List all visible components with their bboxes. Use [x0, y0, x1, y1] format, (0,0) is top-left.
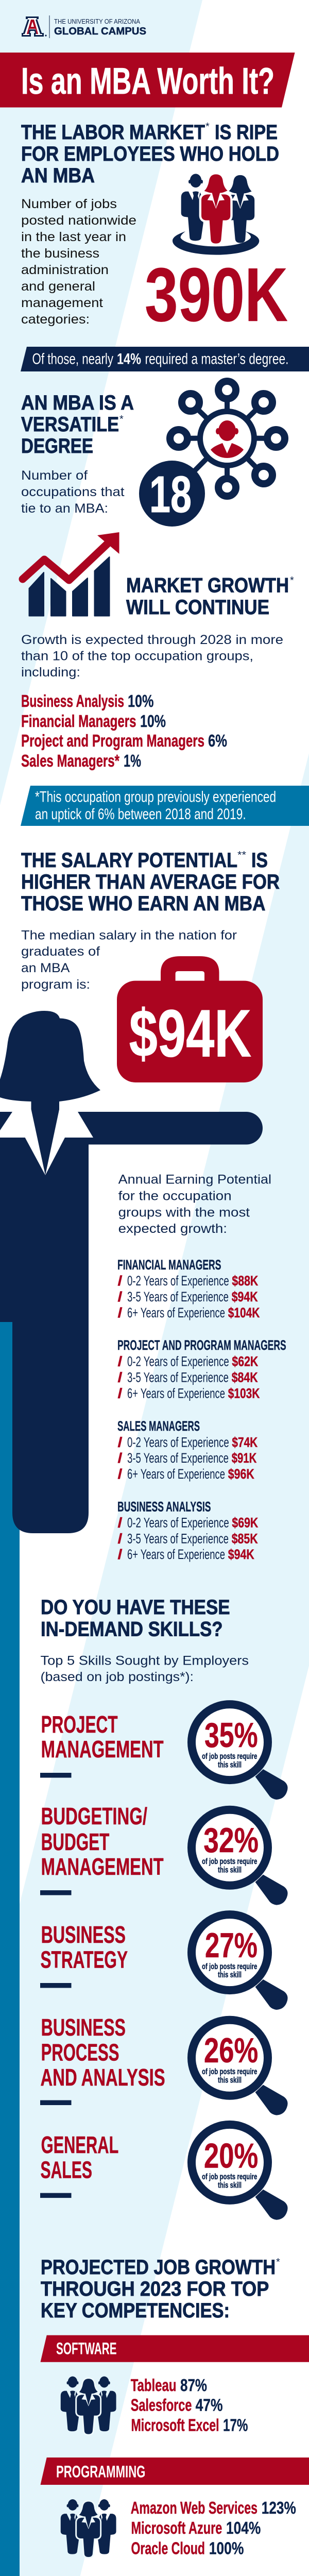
list: sales managers earnings: 3-5 Years of Experience: [127, 1450, 229, 1466]
list: business analysis earnings: 6+ Years of Experience: [127, 1547, 225, 1562]
skill: general sales: GENERAL: [41, 2131, 118, 2158]
list: financial managers earnings: 6+ Years of Experience: [127, 1305, 225, 1320]
list: programming growth: [131, 2498, 296, 2557]
text: annual earning potential: Annual Earning Potential: [118, 1173, 271, 1187]
callout: occupation group note: [21, 786, 309, 826]
list: growth by occupation group: Financial Managers: [21, 711, 136, 731]
list: sales managers earnings: $91K: [232, 1450, 257, 1466]
heading: projected job growth: *: [276, 2257, 280, 2268]
skill: business strategy: [40, 1921, 128, 1988]
magnifier: 26%: of job posts require: [202, 2067, 258, 2076]
list: growth by occupation group: Business Analysis: [21, 691, 124, 710]
list: project and program managers earnings: $62K: [232, 1353, 259, 1369]
heading: projected job growth: THROUGH 2023 FOR TOP: [41, 2278, 269, 2300]
banner: programming: [40, 2458, 309, 2485]
magnifier: 26%: this skill: [218, 2076, 242, 2084]
skill: budgeting / budget management: MANAGEMENT: [41, 1853, 164, 1880]
list: business analysis earnings: $85K: [232, 1531, 258, 1547]
skill: general sales: SALES: [40, 2157, 92, 2183]
skill: business process and analysis: PROCESS: [41, 2039, 119, 2066]
heading: market growth: [126, 574, 294, 619]
heading: salary potential: **: [237, 850, 246, 861]
magnifier: 32%: of job posts require: [202, 1857, 258, 1866]
text: number of jobs posted: in the last year in: [21, 230, 126, 244]
title banner: [0, 53, 295, 107]
list: business analysis earnings: $69K: [232, 1515, 259, 1531]
text: number of occupations: occupations that: [21, 485, 125, 499]
logo: University of Arizona Global Campus: THE UNIVERSITY OF ARIZONA: [54, 18, 140, 25]
banner: software: [40, 2335, 309, 2362]
list: growth by occupation group: 1%: [124, 751, 141, 770]
list: financial managers earnings: 0-2 Years of Experience: [127, 1273, 229, 1289]
list: financial managers earnings: FINANCIAL MANAGERS: [117, 1257, 221, 1273]
list: programming growth: Microsoft Azure: [131, 2518, 222, 2537]
heading: in-demand skills: [41, 1596, 230, 1640]
heading: labor market: IS RIPE: [215, 121, 278, 144]
heading: in-demand skills: IN-DEMAND SKILLS?: [41, 1618, 222, 1640]
magnifier: 27%: this skill: [218, 1971, 242, 1979]
list: growth by occupation group: 10%: [128, 691, 153, 710]
text: growth expected: [21, 633, 283, 680]
skill: business process and analysis: AND ANALYSIS: [40, 2064, 165, 2091]
heading: market growth: MARKET GROWTH: [126, 574, 289, 597]
skill: project management: MANAGEMENT: [41, 1736, 164, 1762]
magnifier: 20%: 20%: [204, 2137, 258, 2176]
magnifier: 32%: 32%: [203, 1821, 259, 1860]
heading: market growth: *: [290, 575, 294, 586]
list: project and program managers earnings: 0-2 Years of Experience: [127, 1353, 229, 1369]
list: financial managers earnings: /: [117, 1305, 123, 1320]
icon: software team: [61, 2377, 116, 2434]
magnifier: 32%: this skill: [218, 1866, 242, 1875]
icon: three business people on a ring: [173, 174, 259, 255]
heading: salary potential: [21, 849, 280, 915]
skill: project management: [40, 1711, 164, 1777]
callout: 14% required a master's degree: [21, 347, 309, 371]
icon: businesswoman figure with outstretched arm: [0, 1011, 263, 1533]
text: median salary: [21, 928, 237, 992]
list: project and program managers earnings: $84K: [232, 1370, 258, 1385]
list: project and program managers earnings: $103K: [228, 1385, 260, 1401]
list: sales managers earnings: /: [117, 1434, 123, 1450]
list: sales managers earnings: $74K: [232, 1434, 258, 1450]
list: programming growth: 123%: [262, 2498, 296, 2517]
list: sales managers earnings: SALES MANAGERS: [117, 1418, 200, 1434]
text: number of jobs posted: [21, 197, 136, 327]
skill: business strategy: BUSINESS: [41, 1921, 126, 1948]
heading: labor market: AN MBA: [21, 164, 95, 187]
skill: budgeting / budget management: [40, 1803, 164, 1895]
list: programming growth: 100%: [209, 2539, 244, 2557]
list: project and program managers earnings: [117, 1337, 286, 1401]
text: median salary: The median salary in the nation for: [21, 928, 237, 943]
heading: labor market: *: [205, 121, 210, 132]
text: number of jobs posted: administration: [21, 263, 109, 277]
text: number of jobs posted: management: [21, 296, 103, 310]
list: financial managers earnings: $88K: [232, 1273, 259, 1289]
list: project and program managers earnings: 3-5 Years of Experience: [127, 1370, 229, 1385]
heading: versatile degree: DEGREE: [21, 435, 93, 457]
list: sales managers earnings: [117, 1418, 258, 1482]
banner: software: SOFTWARE: [56, 2339, 117, 2358]
text: annual earning potential: groups with the most: [118, 1206, 250, 1220]
list: financial managers earnings: /: [117, 1273, 123, 1289]
list: financial managers earnings: [117, 1257, 260, 1320]
magnifier: 35%: this skill: [218, 1761, 242, 1770]
text: number of jobs posted: posted nationwide: [21, 213, 136, 228]
heading: labor market: [21, 121, 279, 187]
banner: programming: PROGRAMMING: [56, 2463, 145, 2481]
list: business analysis earnings: 3-5 Years of Experience: [127, 1531, 229, 1547]
text: number of jobs posted: and general: [21, 279, 95, 294]
callout: occupation group note: an uptick of 6% between 2018 and 2019.: [35, 806, 246, 823]
list: growth by occupation group: Project and Program Managers: [21, 731, 204, 750]
text: top 5 skills: [40, 1654, 249, 1684]
text: number of jobs posted: Number of jobs: [21, 197, 117, 211]
heading: projected job growth: [41, 2256, 280, 2322]
list: business analysis earnings: $94K: [228, 1547, 254, 1562]
icon: programming team: [61, 2499, 116, 2557]
list: sales managers earnings: 0-2 Years of Experience: [127, 1434, 229, 1450]
text: annual earning potential: for the occupation: [118, 1189, 232, 1204]
magnifier: 27%: [192, 1914, 288, 2010]
magnifier: 27%: of job posts require: [202, 1962, 258, 1971]
text: number of occupations: Number of: [21, 468, 88, 483]
skill: project management: PROJECT: [41, 1711, 117, 1738]
text: number of occupations: tie to an MBA:: [21, 501, 108, 516]
list: project and program managers earnings: 6+ Years of Experience: [127, 1385, 225, 1401]
skill: budgeting / budget management: BUDGETING/: [41, 1803, 147, 1829]
logo: University of Arizona Global Campus: [22, 15, 146, 38]
magnifier: 27%: 27%: [205, 1926, 258, 1965]
text: annual earning potential: [118, 1173, 271, 1236]
icon: briefcase with $94K: [117, 956, 263, 1082]
list: financial managers earnings: 3-5 Years of Experience: [127, 1289, 229, 1304]
text: median salary: graduates of: [21, 944, 100, 959]
list: project and program managers earnings: /: [117, 1353, 123, 1369]
list: financial managers earnings: $94K: [232, 1289, 258, 1304]
heading: labor market: THE LABOR MARKET: [21, 121, 205, 144]
skill: business process and analysis: BUSINESS: [41, 2014, 126, 2041]
text: annual earning potential: expected growth:: [118, 1222, 227, 1236]
list: software growth: Microsoft Excel: [131, 2415, 219, 2435]
heading: market growth: WILL CONTINUE: [126, 596, 269, 619]
callout: 14% required a master's degree: 14%: [117, 350, 141, 368]
text: top 5 skills: Top 5 Skills Sought by Employers: [40, 1654, 249, 1668]
heading: versatile degree: VERSATILE: [21, 413, 119, 436]
text: top 5 skills: (based on job postings*):: [40, 1670, 194, 1684]
list: business analysis earnings: 0-2 Years of Experience: [127, 1515, 229, 1531]
list: sales managers earnings: 6+ Years of Experience: [127, 1466, 225, 1482]
list: software growth: Salesforce: [131, 2396, 192, 2415]
list: project and program managers earnings: /: [117, 1370, 123, 1385]
text: number of jobs posted: the business: [21, 246, 99, 261]
heading: salary potential: THOSE WHO EARN AN MBA: [21, 892, 266, 915]
list: growth by occupation group: Sales Managers*: [21, 751, 119, 770]
list: financial managers earnings: $104K: [228, 1305, 260, 1320]
list: business analysis earnings: [117, 1499, 259, 1562]
text: number of occupations: [21, 468, 125, 516]
magnifier: 20%: [192, 2125, 288, 2220]
heading: in-demand skills: DO YOU HAVE THESE: [41, 1596, 230, 1619]
list: software growth: 17%: [223, 2415, 248, 2435]
list: programming growth: 104%: [226, 2518, 261, 2537]
heading: versatile degree: *: [119, 414, 124, 425]
logo: University of Arizona Global Campus: GLOBAL CAMPUS: [54, 26, 146, 37]
list: sales managers earnings: /: [117, 1466, 123, 1482]
text: growth expected: including:: [21, 665, 80, 680]
list: financial managers earnings: /: [117, 1289, 123, 1304]
list: programming growth: Oracle Cloud: [131, 2539, 205, 2557]
list: software growth: 87%: [180, 2376, 207, 2395]
skill: business process and analysis: [40, 2014, 165, 2105]
list: software growth: 47%: [196, 2396, 222, 2415]
list: software growth: Tableau: [131, 2376, 176, 2395]
icon: briefcase with $94K: $94K: [129, 995, 251, 1071]
text: growth expected: than 10 of the top occupation groups,: [21, 649, 253, 664]
heading: salary potential: THE SALARY POTENTIAL: [21, 849, 237, 872]
list: business analysis earnings: /: [117, 1531, 123, 1547]
list: business analysis earnings: /: [117, 1547, 123, 1562]
teal left bar: [0, 1322, 20, 2576]
list: programming growth: Amazon Web Services: [131, 2498, 258, 2517]
heading: salary potential: IS: [251, 849, 268, 872]
list: project and program managers earnings: /: [117, 1385, 123, 1401]
icon: occupation network with 18: [139, 381, 285, 527]
heading: versatile degree: AN MBA IS A: [21, 392, 134, 414]
text: growth expected: Growth is expected through 2028 in more: [21, 633, 283, 647]
magnifier: 26%: [192, 2020, 288, 2115]
skill: general sales: [40, 2131, 118, 2198]
skill: business strategy: STRATEGY: [40, 1946, 128, 1973]
list: growth by occupation group: 6%: [208, 731, 227, 750]
list: software growth: [131, 2376, 248, 2435]
icon: occupation network with 18: 18: [149, 466, 192, 523]
text: median salary: an MBA: [21, 961, 70, 975]
heading: versatile degree: [21, 392, 134, 457]
text: number of jobs posted: categories:: [21, 312, 90, 327]
list: business analysis earnings: BUSINESS ANALYSIS: [117, 1499, 211, 1515]
magnifier: 35%: [192, 1704, 288, 1800]
magnifier: 35%: 35%: [204, 1716, 258, 1755]
text: median salary: program is:: [21, 977, 90, 992]
magnifier: 20%: this skill: [218, 2181, 242, 2190]
magnifier: 26%: 26%: [204, 2031, 258, 2070]
icon: rising bar chart with arrow: [23, 532, 119, 616]
list: sales managers earnings: /: [117, 1450, 123, 1466]
magnifier: 32%: [192, 1810, 288, 1905]
skill: budgeting / budget management: BUDGET: [41, 1828, 109, 1855]
heading: projected job growth: PROJECTED JOB GROWTH: [41, 2256, 276, 2279]
magnifier: 20%: of job posts require: [202, 2173, 258, 2181]
heading: projected job growth: KEY COMPETENCIES:: [41, 2299, 230, 2322]
list: growth by occupation group: [21, 691, 227, 770]
list: sales managers earnings: $96K: [228, 1466, 254, 1482]
list: business analysis earnings: /: [117, 1515, 123, 1531]
callout: 14% required a master's degree: Of those, nearly: [32, 350, 113, 368]
list: growth by occupation group: 10%: [140, 711, 166, 731]
magnifier: 35%: of job posts require: [202, 1752, 258, 1761]
